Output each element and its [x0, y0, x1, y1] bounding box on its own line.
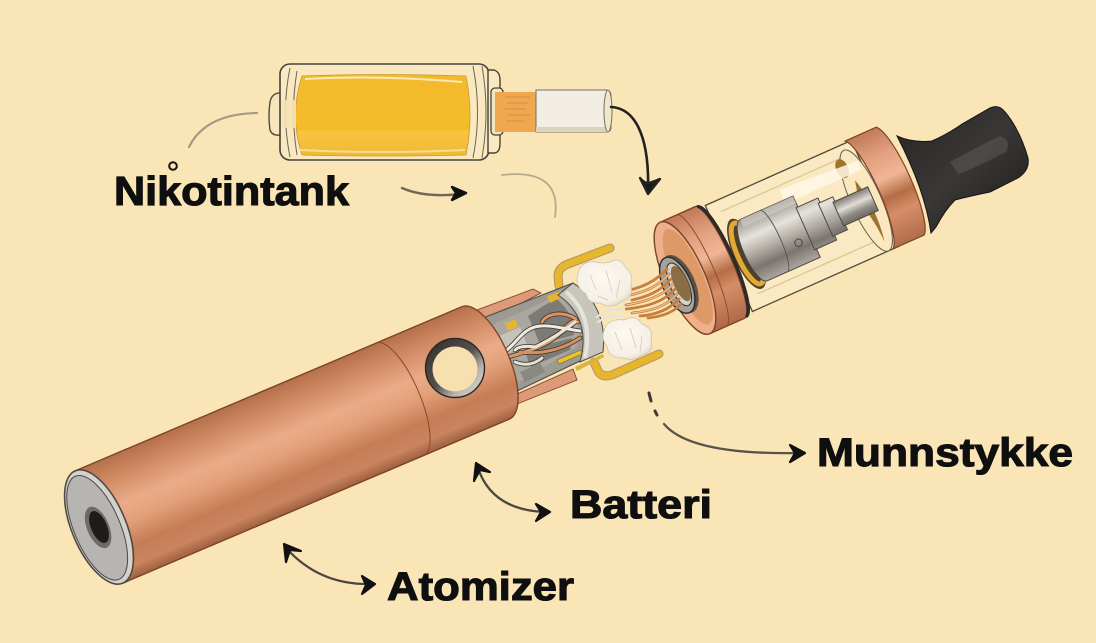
gold bracket lower fill	[594, 354, 659, 376]
mouthpiece	[897, 107, 1028, 233]
arrow: bottle to tank	[611, 107, 660, 194]
far end ring	[830, 144, 902, 257]
icon: nicotine bottle	[269, 64, 612, 160]
copper shells	[477, 289, 577, 404]
label: Nikotintank: Nikotintank	[114, 168, 349, 214]
gold bracket upper fill	[558, 248, 610, 286]
metal hub	[652, 250, 706, 319]
gold bracket lower	[594, 354, 659, 376]
button hole	[426, 338, 484, 398]
arrow: Munnstykke	[649, 393, 805, 462]
label: Batteri: Batteri	[570, 483, 712, 527]
internal electronics section	[477, 283, 604, 404]
cotton upper	[577, 260, 632, 306]
label: Munnstykke: Munnstykke	[817, 431, 1073, 475]
arrow: Batteri	[474, 463, 550, 521]
glass tube	[705, 140, 899, 311]
seam	[376, 335, 442, 455]
end cap	[50, 460, 148, 594]
end ring	[558, 283, 604, 362]
metal atomizer core	[731, 196, 820, 285]
glass highlight	[779, 156, 861, 204]
mouthpiece highlight	[950, 136, 1008, 174]
copper cylinder	[75, 297, 532, 583]
cotton lower	[603, 318, 652, 359]
arrow: pointing right from Nikotintank	[402, 187, 466, 200]
atomizer body	[50, 297, 532, 594]
decorative grey arc right	[502, 174, 556, 217]
twisted wires	[503, 314, 580, 364]
gold ring	[719, 214, 774, 294]
copper base	[660, 202, 755, 334]
copper wick wires	[597, 269, 681, 322]
decorative grey arc left	[189, 113, 257, 147]
end hole	[79, 503, 117, 552]
vape tank	[642, 122, 935, 342]
label: Atomizer: Atomizer	[387, 565, 574, 609]
grey chassis	[483, 283, 603, 392]
arrow: Atomizer	[284, 544, 375, 594]
copper top ring	[845, 123, 934, 249]
base face	[642, 214, 728, 342]
gold bracket upper	[558, 248, 610, 286]
